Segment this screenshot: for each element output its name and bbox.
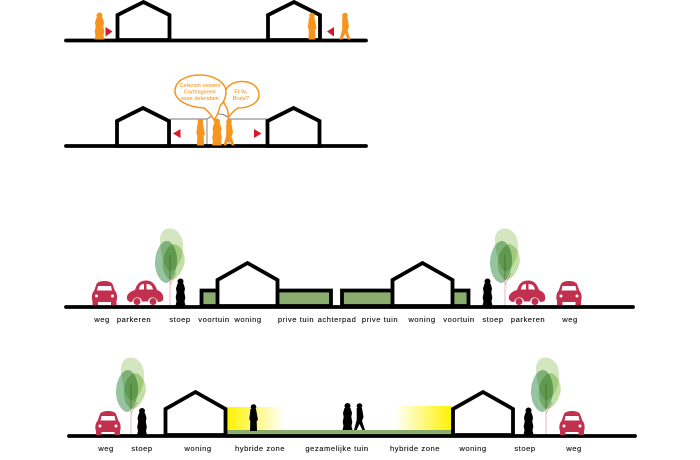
car right row 4 [559, 411, 585, 435]
arrow left row 2 [173, 129, 180, 138]
labels row 3: stoep [169, 315, 191, 324]
person right row 3 [482, 278, 492, 306]
person hybrid zone [249, 404, 258, 431]
speech bubble right: Brute? [233, 96, 249, 102]
ground line row 3 [66, 305, 633, 309]
labels row 4: stoep [131, 444, 153, 453]
car front left row 3 [92, 281, 117, 305]
speech bubble left: esse delendam [181, 96, 219, 102]
row 2: neighbours in conversation [66, 75, 366, 146]
speech bubble left [175, 75, 226, 120]
labels row 4: weg [565, 444, 582, 453]
house right row 4 [453, 392, 513, 435]
arrow left row 1 [327, 27, 334, 36]
house left row 2 [117, 108, 169, 146]
labels row 4: gezamelijke tuin [305, 444, 369, 453]
person three row 2 [224, 119, 234, 146]
house right row 2 [268, 108, 320, 146]
labels row 3: weg [561, 315, 578, 324]
person left row 3 [176, 278, 186, 306]
row 1: houses without contact [66, 2, 366, 40]
house left row 1 [118, 2, 170, 40]
labels row 4: woning [458, 444, 487, 453]
shared garden band [226, 430, 453, 435]
labels row 3: weg [93, 315, 110, 324]
labels row 3: woning [407, 315, 436, 324]
arrow right row 1 [106, 27, 112, 36]
tree left row 3 [155, 229, 185, 305]
house left row 4 [166, 392, 226, 435]
tree left row 4 [116, 358, 146, 434]
labels row 3: achterpad [318, 315, 356, 324]
ground line row 1 [66, 39, 366, 42]
hybrid zone right [394, 406, 452, 431]
labels row 4: hybride zone [390, 444, 440, 453]
car side left row 3 [127, 280, 163, 305]
speech bubble left: Ceterum censeo [180, 83, 220, 89]
hybrid zone left [227, 407, 285, 431]
speech bubble right [224, 81, 259, 118]
labels row 3: prive tuin [278, 315, 314, 324]
tree right row 3 [490, 229, 520, 305]
person in house row 1 [308, 13, 316, 40]
labels row 3 [93, 315, 578, 324]
labels row 3: parkeren [511, 315, 545, 324]
speech bubble right: Et tu, [234, 89, 248, 95]
labels row 3: prive tuin [362, 315, 398, 324]
arrow right row 2 [254, 129, 262, 138]
person left row 4 [137, 408, 147, 435]
person right row 4 [524, 408, 534, 434]
tree right row 4 [531, 358, 561, 434]
labels row 3: woning [233, 315, 262, 324]
person garden one [342, 403, 352, 430]
labels row 3: stoep [482, 315, 504, 324]
car left row 4 [95, 411, 121, 435]
front garden left [202, 290, 218, 306]
speech bubble left: Carthaginem [184, 90, 216, 96]
labels row 3: voortuin [443, 315, 475, 324]
person garden two [354, 403, 365, 430]
house left row 3 [218, 263, 278, 306]
labels row 4: weg [97, 444, 114, 453]
person two row 2 [212, 118, 222, 146]
private garden left [277, 290, 331, 306]
fences and gate [170, 114, 267, 145]
car front right row 3 [556, 281, 582, 305]
car side right row 3 [509, 280, 545, 305]
labels row 4: woning [183, 444, 212, 453]
house right row 1 [268, 2, 320, 40]
walking person row 1 [340, 13, 350, 40]
labels row 4: hybride zone [235, 444, 285, 453]
house right row 3 [392, 263, 452, 306]
labels row 3: parkeren [117, 315, 151, 324]
row 4: hybrid zone section [69, 358, 635, 453]
private garden right [342, 290, 393, 306]
labels row 3: voortuin [198, 315, 230, 324]
person left row 1 [94, 12, 104, 40]
ground line row 4 [69, 434, 635, 438]
ground line row 2 [66, 144, 366, 148]
front garden right [452, 290, 468, 306]
labels row 4: stoep [514, 444, 536, 453]
row 3: traditional street section [66, 229, 633, 324]
person one row 2 [196, 119, 205, 146]
labels row 4 [97, 444, 582, 453]
